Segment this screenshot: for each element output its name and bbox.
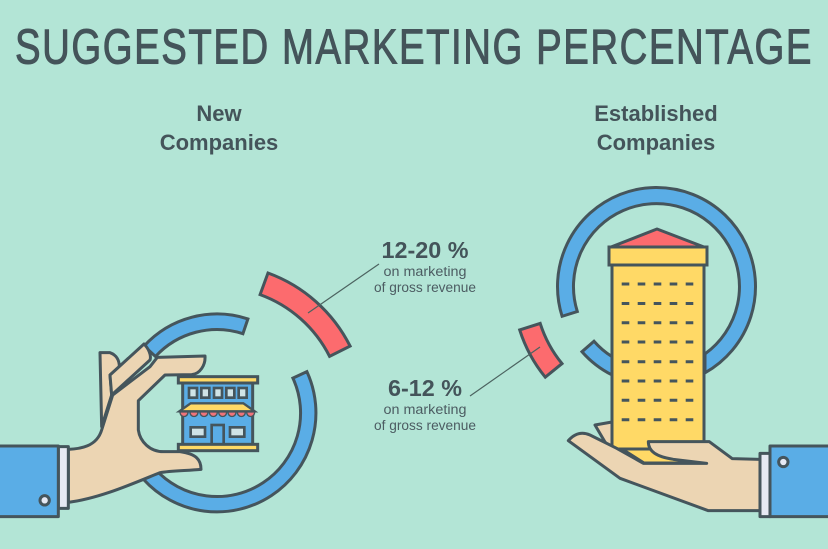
tower cap: [609, 247, 707, 265]
callout: 12-20 percent: on marketing: [384, 264, 466, 279]
palm and thumb: [68, 356, 205, 502]
awning: [179, 403, 255, 411]
heading: new companies: Companies: [160, 130, 278, 155]
tower body: [612, 265, 704, 449]
callout: 6-12 percent: 6-12 %: [388, 375, 462, 401]
roof: [611, 229, 704, 247]
tower base: [622, 449, 704, 463]
store body: [183, 382, 253, 445]
ring: established companies: [558, 187, 756, 375]
red arc segment: 12-20 percent: [260, 273, 350, 356]
back finger: [100, 353, 119, 427]
callout: 6-12 percent: of gross revenue: [374, 418, 476, 433]
tower windows: [622, 284, 694, 420]
heading: new companies: New: [196, 101, 242, 126]
palm and thumb: [568, 433, 760, 511]
awning scallops: [180, 412, 255, 416]
store icon: [178, 377, 258, 451]
hand holding building (back finger): [595, 422, 612, 450]
heading: established companies: Established: [594, 101, 718, 126]
top bar: [178, 377, 258, 383]
lower windows and door: [191, 425, 244, 445]
tower building: [609, 229, 707, 463]
bottom bar: [178, 444, 258, 451]
sleeve button: [779, 457, 788, 467]
callout: 6-12 percent: [374, 375, 476, 433]
heading: established companies: Companies: [597, 130, 715, 155]
upper windows: [189, 388, 247, 398]
callout: 12-20 percent: [374, 237, 476, 295]
open hand: [568, 433, 828, 517]
leader line: 6-12 percent: [470, 347, 540, 396]
index finger: [110, 344, 150, 395]
leader line: 12-20 percent: [308, 264, 379, 313]
blue sleeve: [770, 446, 828, 517]
blue sleeve: [0, 446, 58, 517]
hand holding store: [0, 344, 205, 517]
callout: 6-12 percent: on marketing: [384, 402, 466, 417]
red arc segment: 6-12 percent: [520, 323, 562, 377]
white shirt cuff: [760, 453, 770, 517]
sleeve button: [40, 496, 49, 505]
white shirt cuff: [58, 447, 68, 508]
callout: 12-20 percent: 12-20 %: [382, 237, 468, 263]
ring: new companies: [143, 314, 316, 512]
callout: 12-20 percent: of gross revenue: [374, 280, 476, 295]
